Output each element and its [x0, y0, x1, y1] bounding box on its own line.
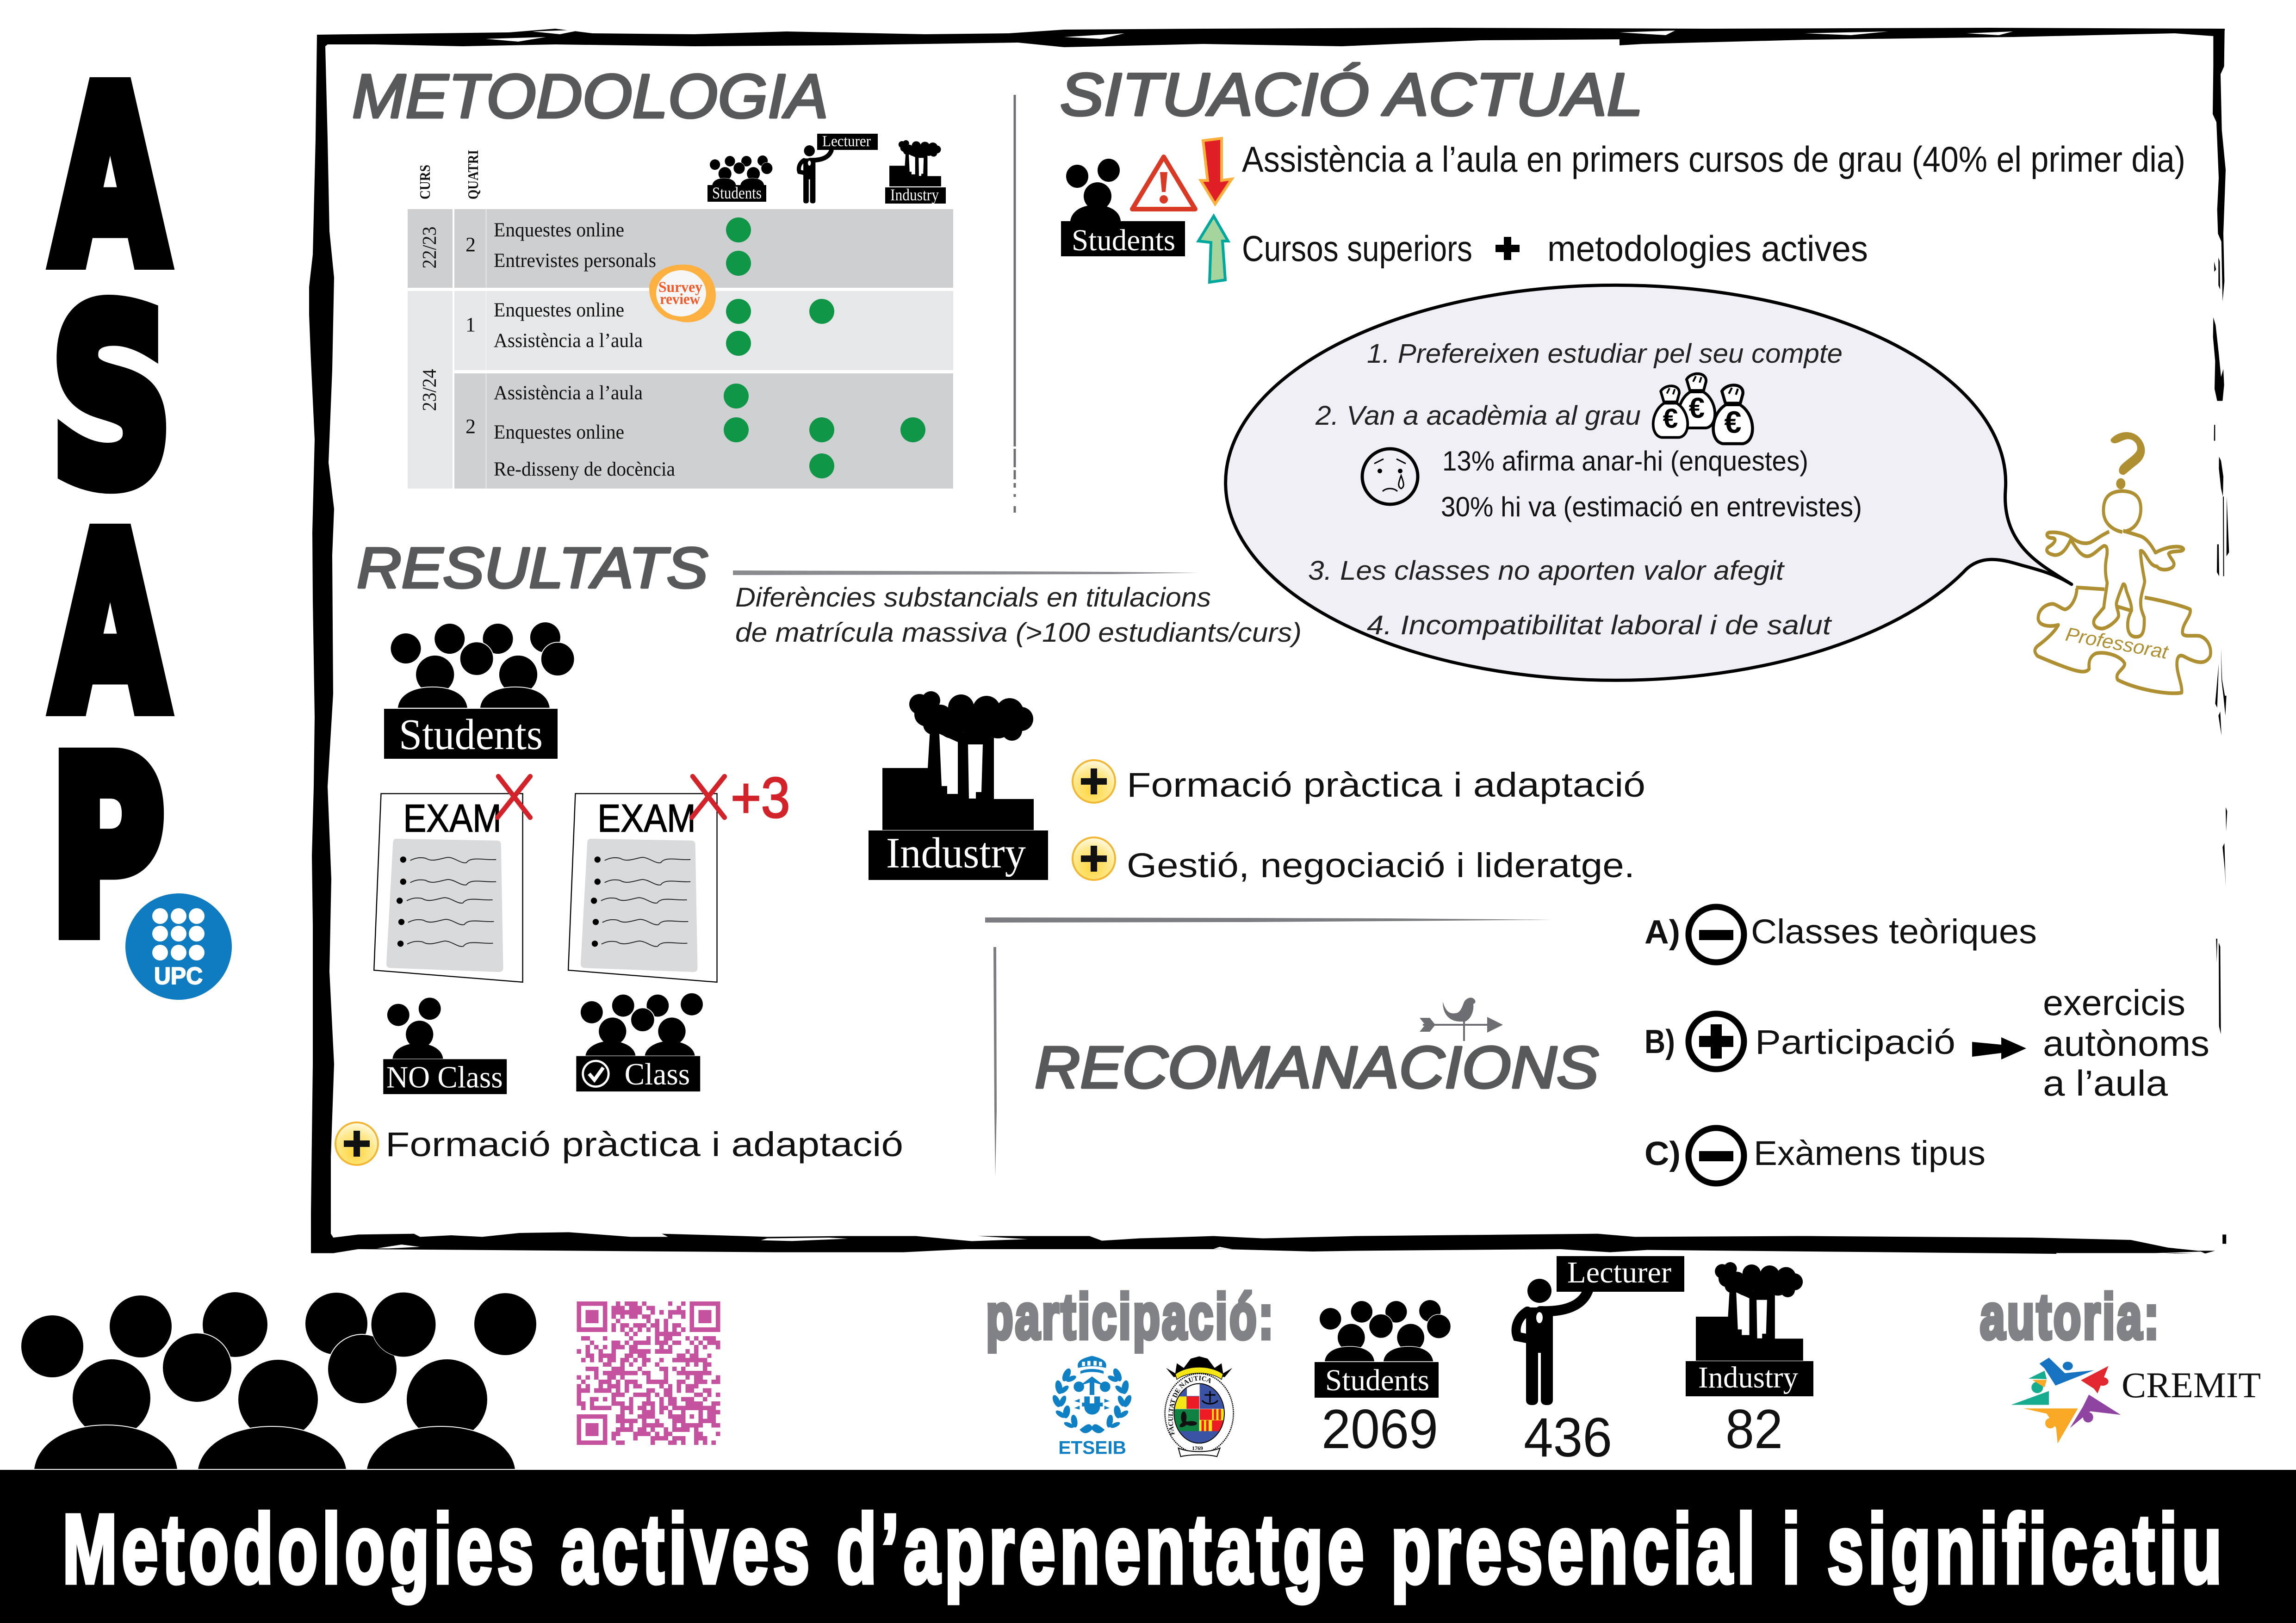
logo: ETSEIB: ETSEIB: [1058, 1437, 1126, 1458]
icon: professorat figure on puzzle: [2035, 432, 2210, 693]
icon: industry large: Industry: [886, 829, 1026, 877]
recommendation B: Participació: [1755, 1023, 1955, 1061]
text: exercicis autonoms: autònoms: [2043, 1023, 2209, 1064]
logo: Facultat de Nautica shield: 1769: [1192, 1445, 1203, 1451]
table year and term labels: 2: [465, 233, 476, 256]
label: plus 3: +3: [731, 766, 790, 830]
bubble text 2: 2. Van a acadèmia al grau: [1315, 401, 1641, 431]
icon: rooster weather vane: [1420, 997, 1503, 1041]
text: differences: Diferències substancials en titulacions: [735, 582, 1211, 613]
logo: UPC: UPC: [154, 963, 203, 990]
table year and term labels: 22/23: [419, 227, 441, 268]
recommendation C: Exàmens tipus: [1754, 1134, 1986, 1172]
logo: Facultat de Nautica shield: [1165, 1357, 1234, 1456]
exams and class comparison: [374, 766, 790, 1095]
table activity labels: Assistència a l’aula: [494, 330, 643, 352]
panel: metodologia: [352, 62, 953, 489]
participation: industry: 82: [1725, 1398, 1783, 1460]
heading: resultats: RESULTATS: [357, 536, 708, 600]
recommendation B: [1644, 982, 2209, 1103]
stamp: survey review: [649, 265, 716, 322]
table column headers: [416, 150, 481, 199]
exam sheet 2: [568, 776, 725, 982]
icon: professorat figure on puzzle: Professorat: [2064, 623, 2171, 663]
table activity labels: Re-disseny de docència: [494, 458, 675, 480]
icon: big crowd: [21, 1292, 536, 1469]
participation: lecturer: 436: [1524, 1406, 1612, 1468]
divider line: [733, 570, 1198, 575]
table year and term labels: 2: [465, 415, 476, 438]
title: ASAP: S: [51, 260, 172, 538]
item: industry plus gestio: Gestió, negociació i lideratge.: [1127, 846, 1635, 885]
text: attendance: Assistència a l’aula en primers cursos de grau (40% el primer dia): [1242, 139, 2185, 180]
panel: recomanacions: [985, 907, 2209, 1183]
table year and term labels: 23/24: [419, 369, 441, 411]
item: industry plus formacio practica: [1073, 760, 1645, 804]
text: upper courses plus active methodologies: [1242, 228, 1868, 269]
icon: money bags: [1653, 374, 1752, 444]
text: exercicis autonoms: [2043, 982, 2209, 1103]
icon: no class group: [383, 997, 507, 1095]
heading: metodologia: METODOLOGIA: [352, 62, 828, 131]
table activity labels: Enquestes online: [494, 219, 624, 241]
footer bar: [0, 1470, 2296, 1623]
icon: students large: Students: [399, 711, 543, 759]
recommendation C: [1644, 1128, 1986, 1183]
icon: green up arrow: [1198, 216, 1228, 282]
icon: students with warning: Students: [1072, 223, 1175, 257]
divider lines: [985, 917, 1552, 1177]
participation: lecturer: [1516, 1256, 1684, 1468]
title: ASAP: A: [53, 486, 168, 764]
bubble text: 30 percent: 30% hi va (estimació en entrevistes): [1441, 491, 1862, 522]
recommendation A: [1644, 907, 2037, 962]
bubble text 3: 3. Les classes no aporten valor afegit: [1308, 556, 1785, 586]
arrow: [1972, 1037, 2026, 1059]
exam sheet 1: EXAM: [403, 797, 502, 840]
participation: lecturer: Lecturer: [1567, 1256, 1671, 1289]
icon: students small: Students: [712, 184, 762, 202]
icon: industry small: [885, 140, 946, 204]
title: ASAP: A: [53, 39, 168, 317]
heading: recomanacions: RECOMANACIONS: [1035, 1035, 1599, 1101]
icon: sad face: [1362, 449, 1418, 504]
panel: resultats: [335, 536, 1645, 1165]
QR code: [577, 1304, 720, 1443]
recommendation A: Classes teòriques: [1751, 912, 2037, 951]
icon: no class group: NO Class: [386, 1060, 503, 1095]
icon: money bags: €: [1689, 392, 1705, 424]
bubble text 4: 4. Incompatibilitat laboral i de salut: [1367, 610, 1832, 640]
participation: industry: Industry: [1698, 1361, 1798, 1394]
text: differences: de matrícula massiva (>100 estudiants/curs): [735, 618, 1302, 648]
table year and term labels: 1: [465, 313, 476, 336]
divider: vertical between metodologia and situacio: [1013, 95, 1016, 513]
logo: Facultat de Nautica shield: FACULTAT DE NAUTICA: [1167, 1375, 1213, 1436]
table participation dots: [724, 217, 925, 478]
text: differences: [735, 582, 1302, 648]
item: industry plus formacio practica: Formació pràctica i adaptació: [1127, 766, 1645, 804]
recommendation A: A): [1644, 914, 1680, 951]
heading: participacio: participació:: [986, 1281, 1275, 1352]
table activity labels: Enquestes online: [494, 299, 624, 321]
heading: situacio actual: SITUACIÓ ACTUAL: [1060, 61, 1643, 128]
recommendation C: C): [1644, 1135, 1681, 1172]
text: exercicis autonoms: exercicis: [2043, 982, 2185, 1023]
table column headers: QUATRI: [465, 150, 481, 199]
icon: money bags: €: [1724, 405, 1742, 440]
icon: industry large: [869, 691, 1048, 880]
panel: situacio actual: [1060, 61, 2210, 693]
logo: CREMIT: CREMIT: [2122, 1365, 2261, 1405]
heading: autoria: autoria:: [1980, 1281, 2161, 1352]
icon: lecturer small: Lecturer: [822, 133, 871, 150]
table column headers: CURS: [416, 165, 433, 199]
logo: ETSEIB: [1051, 1356, 1133, 1458]
logo: UPC: [125, 893, 232, 1000]
icon: class group: Class: [625, 1057, 690, 1091]
participation: students: [1315, 1300, 1451, 1460]
stamp: survey review: Survey: [658, 279, 702, 296]
table activity labels: Enquestes online: [494, 421, 624, 443]
icon: class group: [576, 993, 703, 1091]
title: ASAP: P: [50, 709, 164, 987]
brush frame: [309, 28, 2229, 1254]
title: ASAP: [50, 39, 172, 987]
table activity labels: Entrevistes personals: [494, 250, 656, 272]
speech bubble: [1226, 285, 2072, 680]
exam sheet 2: EXAM: [597, 797, 696, 840]
icon: money bags: €: [1663, 404, 1678, 434]
icon: students with warning: [1061, 159, 1185, 257]
text: upper courses plus active methodologies: Cursos superiors: [1242, 228, 1472, 269]
participation: students: Students: [1325, 1363, 1429, 1397]
text: upper courses plus active methodologies: metodologies actives: [1547, 228, 1868, 269]
table activity labels: [494, 219, 675, 480]
icon: red down arrow: [1201, 138, 1232, 204]
table activity labels: Assistència a l’aula: [494, 382, 643, 404]
item: student plus formacio practica: Formació pràctica i adaptació: [385, 1125, 903, 1164]
exam sheet 1: [374, 776, 530, 982]
stamp: survey review: review: [660, 291, 700, 308]
icon: lecturer small: [799, 133, 878, 204]
recommendation B: B): [1644, 1023, 1675, 1060]
logo: CREMIT: [2011, 1357, 2261, 1443]
participation: industry: [1686, 1262, 1813, 1460]
item: industry plus gestio: [1073, 837, 1635, 885]
table background: [408, 209, 953, 489]
bubble text: 13 percent: 13% afirma anar-hi (enquestes): [1442, 446, 1808, 477]
icon: warning triangle: [1132, 157, 1195, 209]
participation: students: 2069: [1322, 1398, 1438, 1460]
text: exercicis autonoms: a l’aula: [2043, 1063, 2168, 1103]
bubble text 1: 1. Prefereixen estudiar pel seu compte: [1367, 339, 1843, 369]
icon: industry small: Industry: [890, 186, 939, 204]
icon: students large: [384, 622, 575, 759]
icon: students small: [707, 155, 773, 202]
table year and term labels: [419, 227, 476, 438]
